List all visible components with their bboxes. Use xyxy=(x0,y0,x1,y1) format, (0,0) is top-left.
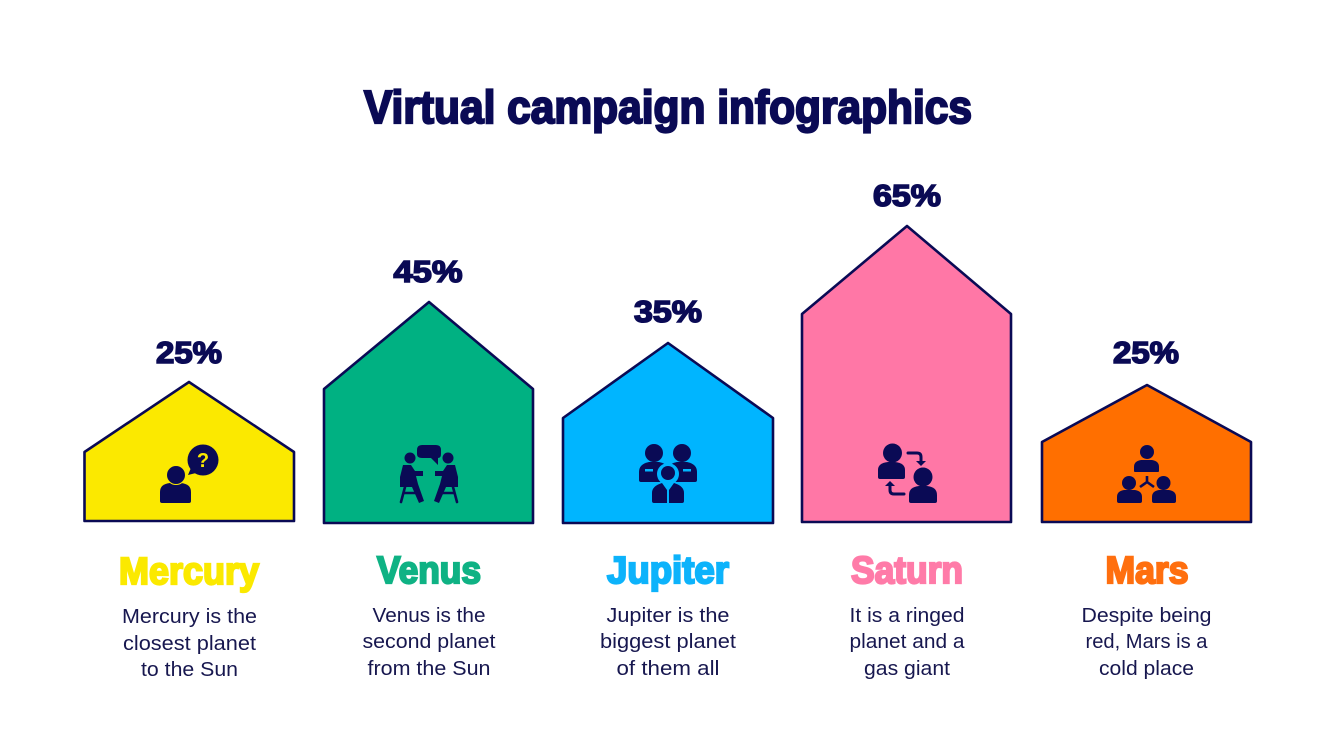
icon: people exchanging xyxy=(878,444,937,503)
description: venus: second planet xyxy=(362,631,496,653)
panel: mercury xyxy=(84,335,294,681)
name: jupiter: Jupiter xyxy=(607,550,729,592)
percentage: saturn: 65% xyxy=(873,178,941,213)
description: jupiter: biggest planet xyxy=(600,631,736,653)
panel: saturn xyxy=(802,178,1011,680)
name: mars: Mars xyxy=(1106,550,1188,592)
description: saturn: planet and a xyxy=(850,631,965,653)
name: saturn: Saturn xyxy=(851,550,963,592)
description: mars: cold place xyxy=(1099,658,1194,680)
description: jupiter: Jupiter is the xyxy=(606,605,730,627)
description: jupiter: of them all xyxy=(616,658,720,680)
description: mercury: closest planet xyxy=(123,633,256,655)
panel: venus xyxy=(324,254,533,680)
description: mars: red, Mars is a xyxy=(1086,631,1208,653)
percentage: venus: 45% xyxy=(394,254,462,289)
percentage: mars: 25% xyxy=(1113,335,1179,370)
description: saturn: gas giant xyxy=(864,658,950,680)
description: venus: from the Sun xyxy=(368,658,490,680)
icon: team of three people xyxy=(639,444,697,503)
title: Virtual campaign infographics xyxy=(364,81,972,133)
description: mars: Despite being xyxy=(1082,605,1212,627)
description: mars xyxy=(1082,605,1212,680)
house bar: jupiter xyxy=(563,343,773,523)
icon: person with question bubble xyxy=(160,444,218,503)
icon: three connected people xyxy=(1117,445,1176,503)
description: jupiter xyxy=(600,605,736,680)
percentage: jupiter: 35% xyxy=(634,294,702,329)
panel: jupiter xyxy=(563,294,773,680)
percentage: mercury: 25% xyxy=(156,335,222,370)
icon: person with question bubble: ? xyxy=(197,450,209,472)
house bar: mercury xyxy=(84,382,294,521)
name: mercury: Mercury xyxy=(119,551,259,593)
panel: mars xyxy=(1042,335,1251,680)
description: mercury: to the Sun xyxy=(141,659,238,681)
icon: two people talking at chairs xyxy=(400,445,458,503)
house bar: saturn xyxy=(802,226,1011,522)
description: mercury xyxy=(122,606,257,681)
house bar: mars xyxy=(1042,385,1251,522)
description: venus: Venus is the xyxy=(372,605,486,627)
house bar: venus xyxy=(324,302,533,523)
description: mercury: Mercury is the xyxy=(122,606,257,628)
description: venus xyxy=(362,605,496,680)
name: venus: Venus xyxy=(377,550,481,592)
description: saturn xyxy=(850,605,965,680)
description: saturn: It is a ringed xyxy=(850,605,964,627)
